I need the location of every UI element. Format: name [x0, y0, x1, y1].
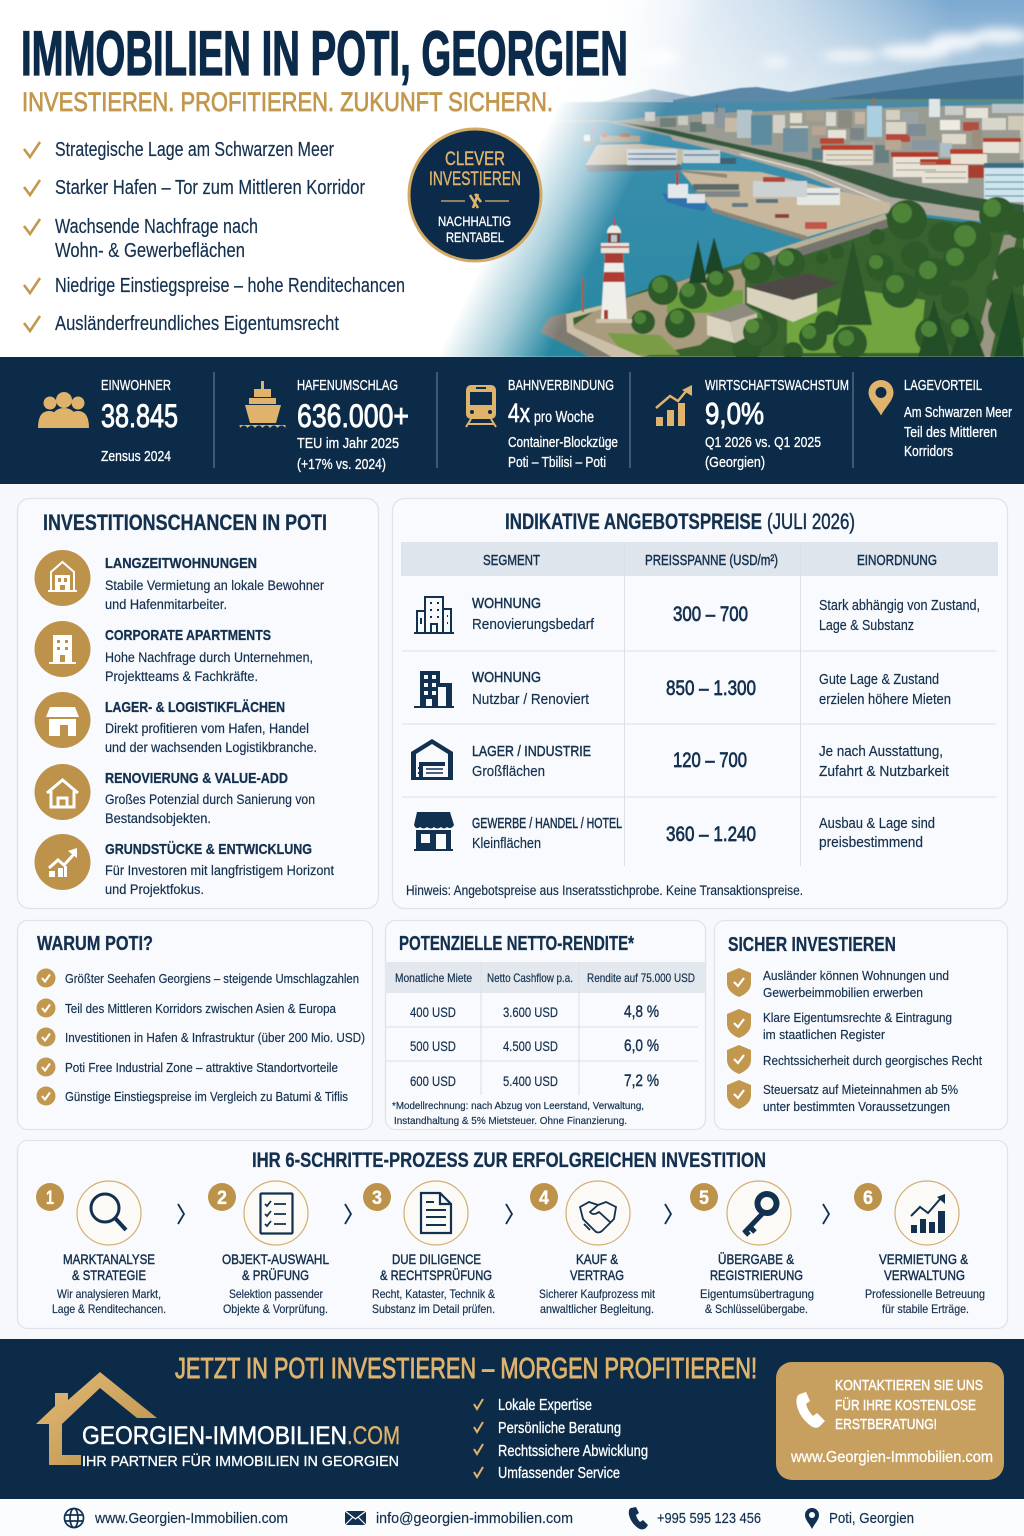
step 5: & Schlüsselübergabe. — [705, 1302, 808, 1316]
step 5: 5 — [699, 1188, 709, 1209]
stat: einwohner: EINWOHNER — [101, 377, 171, 394]
location: Poti, Georgien — [829, 1510, 914, 1527]
contact box: ERSTBERATUNG! — [835, 1416, 937, 1433]
heading: (JULI 2026) — [767, 509, 855, 534]
rendite table: Rendite auf 75.000 USD — [587, 971, 695, 985]
rendite table: 5.400 USD — [503, 1073, 558, 1089]
tall buildings and red-roof blocks — [716, 98, 1024, 202]
row: wohnung renovierungsbedarf: Stark abhängig von Zustand, — [819, 598, 980, 614]
lighthouse — [582, 278, 584, 312]
row: lager industrie: Zufahrt & Nutzbarkeit — [819, 764, 949, 780]
row: wohnung renoviert: Gute Lage & Zustand — [819, 672, 939, 688]
panel: angebotspreise — [392, 498, 1008, 908]
icon: ship — [240, 381, 286, 428]
contact box: KONTAKTIEREN SIE UNS — [835, 1377, 983, 1394]
stat: bahnverbindung — [466, 377, 618, 471]
email: info@georgien-immobilien.com — [376, 1510, 573, 1527]
item: grundstuecke: Für Investoren mit langfristigem Horizont — [105, 863, 334, 878]
rendite table: 600 USD — [410, 1073, 456, 1089]
item: grundstuecke: und Projektfokus. — [105, 882, 204, 897]
stat: hafenumschlag: 636.000+ — [297, 398, 409, 434]
step 2 — [208, 1181, 329, 1316]
step 1: MARKTANALYSE — [63, 1251, 155, 1267]
rendite table — [385, 962, 705, 1095]
badge: clever investieren: RENTABEL — [446, 229, 504, 245]
security point 3 — [727, 1045, 982, 1074]
security point 3: Rechtssicherheit durch georgisches Recht — [763, 1053, 982, 1068]
item: langzeitwohnungen: LANGZEITWOHNUNGEN — [105, 555, 257, 572]
table header: SEGMENT — [483, 552, 540, 569]
badge: clever investieren: CLEVER — [445, 149, 505, 170]
footnote: *Modellrechnung: nach Abzug von Leerstand, Verwaltung, — [392, 1100, 644, 1112]
step 1: & STRATEGIE — [72, 1267, 146, 1283]
step 6: Professionelle Betreuung — [865, 1287, 985, 1301]
step 5: Eigentumsübertragung — [700, 1287, 814, 1301]
stat: wirtschaftswachstum: 9,0% — [705, 396, 764, 431]
benefit 4: Niedrige Einstiegspreise – hohe Renditechancen — [55, 275, 405, 297]
stat: hafenumschlag: TEU im Jahr 2025 — [297, 435, 399, 452]
table header — [401, 542, 998, 576]
title: IMMOBILIEN IN POTI, GEORGIEN — [21, 19, 628, 89]
stat: bahnverbindung: Poti – Tbilisi – Poti — [508, 454, 606, 471]
row: wohnung renoviert — [414, 669, 951, 708]
row: gewerbe handel hotel: Ausbau & Lage sind — [819, 816, 935, 832]
badge: clever investieren — [409, 129, 541, 261]
benefit 1: Strategische Lage am Schwarzen Meer — [55, 139, 334, 161]
benefit 3: Wachsende Nachfrage nach — [55, 216, 258, 238]
stat: wirtschaftswachstum: (Georgien) — [705, 454, 765, 471]
row: wohnung renovierungsbedarf — [414, 595, 980, 634]
rendite table: 6,0 % — [624, 1036, 659, 1055]
item: langzeitwohnungen: Stabile Vermietung an lokale Bewohner — [105, 578, 324, 593]
row: wohnung renovierungsbedarf: WOHNUNG — [472, 595, 541, 612]
stat: lagevorteil: Teil des Mittleren — [904, 424, 997, 441]
benefit 2: Starker Hafen – Tor zum Mittleren Korridor — [55, 177, 365, 199]
step 4: KAUF & — [576, 1251, 619, 1267]
item: renovierung: Bestandsobjekten. — [105, 811, 211, 826]
step 4: VERTRAG — [570, 1267, 624, 1283]
security point 2 — [727, 1009, 952, 1042]
security point 2: Klare Eigentumsrechte & Eintragung — [763, 1010, 952, 1025]
hero fade to white — [0, 0, 1024, 357]
cta checklist: Rechtssichere Abwicklung — [498, 1443, 648, 1460]
item: renovierung — [34, 764, 315, 826]
logo: IHR PARTNER FÜR IMMOBILIEN IN GEORGIEN — [82, 1452, 399, 1470]
heading: INDIKATIVE ANGEBOTSPREISE — [505, 509, 762, 534]
row: lager industrie — [411, 739, 949, 780]
step 5: ÜBERGABE & — [718, 1250, 795, 1267]
heading: IHR 6-SCHRITTE-PROZESS ZUR ERFOLGREICHEN INVESTITION — [252, 1149, 766, 1172]
step 4: 4 — [539, 1188, 549, 1209]
icon: map pin — [868, 380, 894, 416]
row: wohnung renovierungsbedarf: 300 – 700 — [673, 603, 748, 626]
trees — [631, 197, 1024, 362]
icon: people — [38, 392, 89, 428]
reason 2 — [36, 998, 337, 1018]
badge: clever investieren: NACHHALTIG — [438, 213, 511, 229]
note: Hinweis: Angebotspreise aus Inseratsstichprobe. Keine Transaktionspreise. — [406, 883, 803, 898]
security point 1: Gewerbeimmobilien erwerben — [763, 985, 923, 1000]
item: grundstuecke: GRUNDSTÜCKE & ENTWICKLUNG — [105, 841, 312, 858]
icon: warehouse — [411, 739, 453, 780]
footnote — [392, 1100, 644, 1127]
stat: lagevorteil: Korridors — [904, 443, 953, 460]
row: gewerbe handel hotel: Kleinflächen — [472, 835, 541, 852]
icon: growth chart — [656, 385, 692, 426]
row: wohnung renoviert: 850 – 1.300 — [666, 677, 756, 700]
step 4 — [530, 1181, 656, 1316]
row: lager industrie: Je nach Ausstattung, — [819, 744, 943, 760]
promenade trees and road — [618, 122, 1024, 222]
benefit 5: Ausländerfreundliches Eigentumsrecht — [55, 313, 339, 335]
row: gewerbe handel hotel: GEWERBE / HANDEL / HOTEL — [472, 816, 622, 832]
stat: einwohner: Zensus 2024 — [101, 448, 171, 465]
panel: sicher investieren — [714, 920, 1008, 1130]
step 6 — [854, 1181, 985, 1316]
heading: WARUM POTI? — [37, 933, 153, 955]
cta checklist: Lokale Expertise — [498, 1397, 592, 1414]
arrow — [823, 1204, 829, 1224]
contact box: FÜR IHRE KOSTENLOSE — [835, 1396, 976, 1414]
rendite table: Monatliche Miete — [395, 971, 472, 985]
cta checklist — [474, 1397, 648, 1482]
step 1: 1 — [46, 1188, 54, 1209]
item: corporate apartments: CORPORATE APARTMENTS — [105, 627, 271, 644]
small city roofs — [645, 104, 1024, 163]
row: lager industrie: LAGER / INDUSTRIE — [472, 743, 591, 760]
rendite table: 4,8 % — [624, 1002, 659, 1021]
step 4: Sicherer Kaufprozess mit — [539, 1287, 656, 1301]
stats band — [0, 357, 1024, 484]
step 3: 3 — [372, 1188, 382, 1209]
reason 5: Günstige Einstiegspreise im Vergleich zu Batumi & Tiflis — [65, 1089, 348, 1104]
row: wohnung renovierungsbedarf: Lage & Substanz — [819, 618, 914, 634]
icon: apartment block — [414, 597, 454, 633]
stat: einwohner — [38, 377, 178, 465]
row: gewerbe handel hotel: preisbestimmend — [819, 835, 923, 851]
city land — [608, 104, 1024, 206]
stat: wirtschaftswachstum: WIRTSCHAFTSWACHSTUM — [705, 377, 849, 394]
cta checklist: Umfassender Service — [498, 1465, 620, 1482]
security point 1 — [727, 968, 949, 1000]
heading: POTENZIELLE NETTO-RENDITE* — [399, 933, 634, 955]
stat: hafenumschlag: HAFENUMSCHLAG — [297, 377, 398, 394]
reason 4: Poti Free Industrial Zone – attraktive Standortvorteile — [65, 1060, 338, 1075]
reason 1 — [36, 968, 359, 988]
step 2: OBJEKT-AUSWAHL — [222, 1251, 329, 1267]
step 6: für stabile Erträge. — [882, 1302, 969, 1316]
row: wohnung renoviert: erzielen höhere Mieten — [819, 692, 951, 708]
step 6: VERWALTUNG — [884, 1267, 965, 1283]
hero image: harbour of Poti — [442, 0, 1024, 357]
step 1 — [36, 1181, 166, 1316]
step 6: VERMIETUNG & — [879, 1251, 969, 1267]
step 2: Selektion passender — [229, 1287, 323, 1301]
step 2: & PRÜFUNG — [242, 1266, 309, 1283]
reason 1: Größter Seehafen Georgiens – steigende Umschlagzahlen — [65, 971, 359, 986]
panel: investitionschancen — [18, 498, 378, 908]
stat: bahnverbindung: Container-Blockzüge — [508, 434, 618, 451]
breakwater and sea wall — [540, 313, 612, 357]
badge: clever investieren: INVESTIEREN — [429, 169, 521, 190]
item: langzeitwohnungen — [34, 550, 324, 612]
item: lager und logistik: LAGER- & LOGISTIKFLÄCHEN — [105, 699, 285, 716]
item: lager und logistik: und der wachsenden Logistikbranche. — [105, 740, 317, 755]
icon: phone — [796, 1392, 825, 1428]
icon: train — [466, 385, 496, 427]
location — [805, 1508, 914, 1529]
rendite table: 500 USD — [410, 1038, 456, 1054]
step 4: anwaltlicher Begleitung. — [540, 1302, 654, 1316]
item: renovierung: RENOVIERUNG & VALUE-ADD — [105, 770, 288, 787]
table header: EINORDNUNG — [857, 552, 937, 569]
row: wohnung renovierungsbedarf: Renovierungsbedarf — [472, 616, 595, 633]
item: lager und logistik — [34, 692, 317, 755]
security point 4 — [727, 1080, 958, 1114]
park buildings — [747, 287, 817, 322]
reason 3: Investitionen in Hafen & Infrastruktur (über 200 Mio. USD) — [65, 1030, 365, 1045]
item: langzeitwohnungen: und Hafenmitarbeiter. — [105, 597, 227, 612]
stat: lagevorteil — [868, 377, 1012, 460]
stat: hafenumschlag — [240, 377, 409, 473]
icon: apartment block — [414, 671, 454, 707]
stat: hafenumschlag: (+17% vs. 2024) — [297, 456, 386, 473]
cta checklist: Persönliche Beratung — [498, 1420, 621, 1437]
subtitle: INVESTIEREN. PROFITIEREN. ZUKUNFT SICHERN. — [22, 87, 553, 117]
item: corporate apartments: Hohe Nachfrage durch Unternehmen, — [105, 650, 313, 665]
heading: INVESTITIONSCHANCEN IN POTI — [43, 510, 327, 535]
call-to-action band — [0, 1339, 1024, 1499]
step 5 — [690, 1181, 814, 1316]
arrow — [506, 1204, 512, 1224]
footnote: Instandhaltung & 5% Mietsteuer. Ohne Finanzierung. — [394, 1115, 627, 1127]
logo house — [36, 1372, 157, 1465]
stat: wirtschaftswachstum: Q1 2026 vs. Q1 2025 — [705, 434, 821, 451]
step 3: Substanz im Detail prüfen. — [372, 1302, 495, 1316]
row: wohnung renoviert: WOHNUNG — [472, 669, 541, 686]
contact bar — [0, 1499, 1024, 1536]
hero benefits list — [24, 139, 405, 335]
rendite table: 7,2 % — [624, 1071, 659, 1090]
rendite table: 3.600 USD — [503, 1004, 558, 1020]
logo: GEORGIEN-IMMOBILIEN — [82, 1422, 347, 1450]
cargo ship — [662, 193, 707, 211]
reason 2: Teil des Mittleren Korridors zwischen Asien & Europa — [65, 1001, 337, 1016]
stat: einwohner: 38.845 — [101, 398, 178, 434]
panel: warum poti — [18, 920, 372, 1130]
row: wohnung renoviert: Nutzbar / Renoviert — [472, 691, 590, 708]
security point 2: im staatlichen Register — [763, 1027, 886, 1042]
rendite table: 4.500 USD — [503, 1038, 558, 1054]
step 3: Recht, Kataster, Technik & — [372, 1287, 495, 1301]
stat: bahnverbindung: 4x — [508, 398, 530, 428]
phone: +995 595 123 456 — [657, 1510, 761, 1527]
step 2: 2 — [217, 1188, 227, 1209]
security point 4: unter bestimmten Voraussetzungen — [763, 1099, 950, 1114]
green parkland — [567, 213, 1024, 357]
step 6: 6 — [863, 1188, 873, 1209]
step 3: DUE DILIGENCE — [392, 1251, 481, 1267]
logo: .COM — [347, 1422, 400, 1450]
item: lager und logistik: Direkt profitieren vom Hafen, Handel — [105, 721, 309, 736]
rendite table: Netto Cashflow p.a. — [487, 971, 573, 985]
logo — [36, 1372, 400, 1470]
heading: SICHER INVESTIEREN — [728, 934, 896, 956]
step 3: & RECHTSPRÜFUNG — [380, 1266, 492, 1283]
item: corporate apartments: Projektteams & Fachkräfte. — [105, 669, 258, 684]
phone — [629, 1507, 761, 1530]
rendite table: 400 USD — [410, 1004, 456, 1020]
arrow — [345, 1204, 351, 1224]
arrow — [665, 1204, 671, 1224]
icon: shop — [414, 812, 454, 851]
arrow — [178, 1204, 184, 1224]
contact box — [776, 1362, 1004, 1480]
table header: PREISSPANNE (USD/m²) — [645, 552, 778, 569]
row: lager industrie: Großflächen — [472, 763, 545, 780]
row: gewerbe handel hotel: 360 – 1.240 — [666, 823, 756, 846]
step 2: Objekte & Vorprüfung. — [223, 1302, 328, 1316]
stat: bahnverbindung: BAHNVERBINDUNG — [508, 377, 614, 394]
panel: 6-schritte-prozess — [18, 1140, 1008, 1328]
harbour quays — [585, 144, 690, 166]
website: www.Georgien-Immobilien.com — [94, 1510, 288, 1527]
panel: netto-rendite — [385, 920, 706, 1130]
row: gewerbe handel hotel — [414, 812, 935, 852]
security point 1: Ausländer können Wohnungen und — [763, 968, 949, 983]
stat: lagevorteil: LAGEVORTEIL — [904, 377, 982, 394]
stat: wirtschaftswachstum — [656, 377, 849, 471]
item: renovierung: Großes Potenzial durch Sanierung von — [105, 792, 315, 807]
stat: bahnverbindung: pro Woche — [534, 409, 594, 426]
row: lager industrie: 120 – 700 — [673, 749, 747, 772]
item: corporate apartments — [34, 621, 313, 684]
reason 5 — [36, 1086, 348, 1106]
reason 3 — [36, 1028, 365, 1046]
step 5: REGISTRIERUNG — [710, 1267, 803, 1283]
contact box: www.Georgien-Immobilien.com — [790, 1449, 993, 1466]
step 3 — [363, 1181, 495, 1316]
item: grundstuecke — [34, 834, 334, 897]
step 1: Wir analysieren Markt, — [57, 1287, 161, 1301]
benefit 3: Wohn- & Gewerbeflächen — [55, 240, 245, 262]
benefit 3 — [24, 216, 258, 262]
security point 4: Steuersatz auf Mieteinnahmen ab 5% — [763, 1082, 958, 1097]
reason 4 — [36, 1058, 338, 1076]
cta headline: JETZT IN POTI INVESTIEREN – MORGEN PROFITIEREN! — [175, 1353, 757, 1385]
moored ship — [580, 140, 598, 146]
step 1: Lage & Renditechancen. — [52, 1302, 166, 1316]
